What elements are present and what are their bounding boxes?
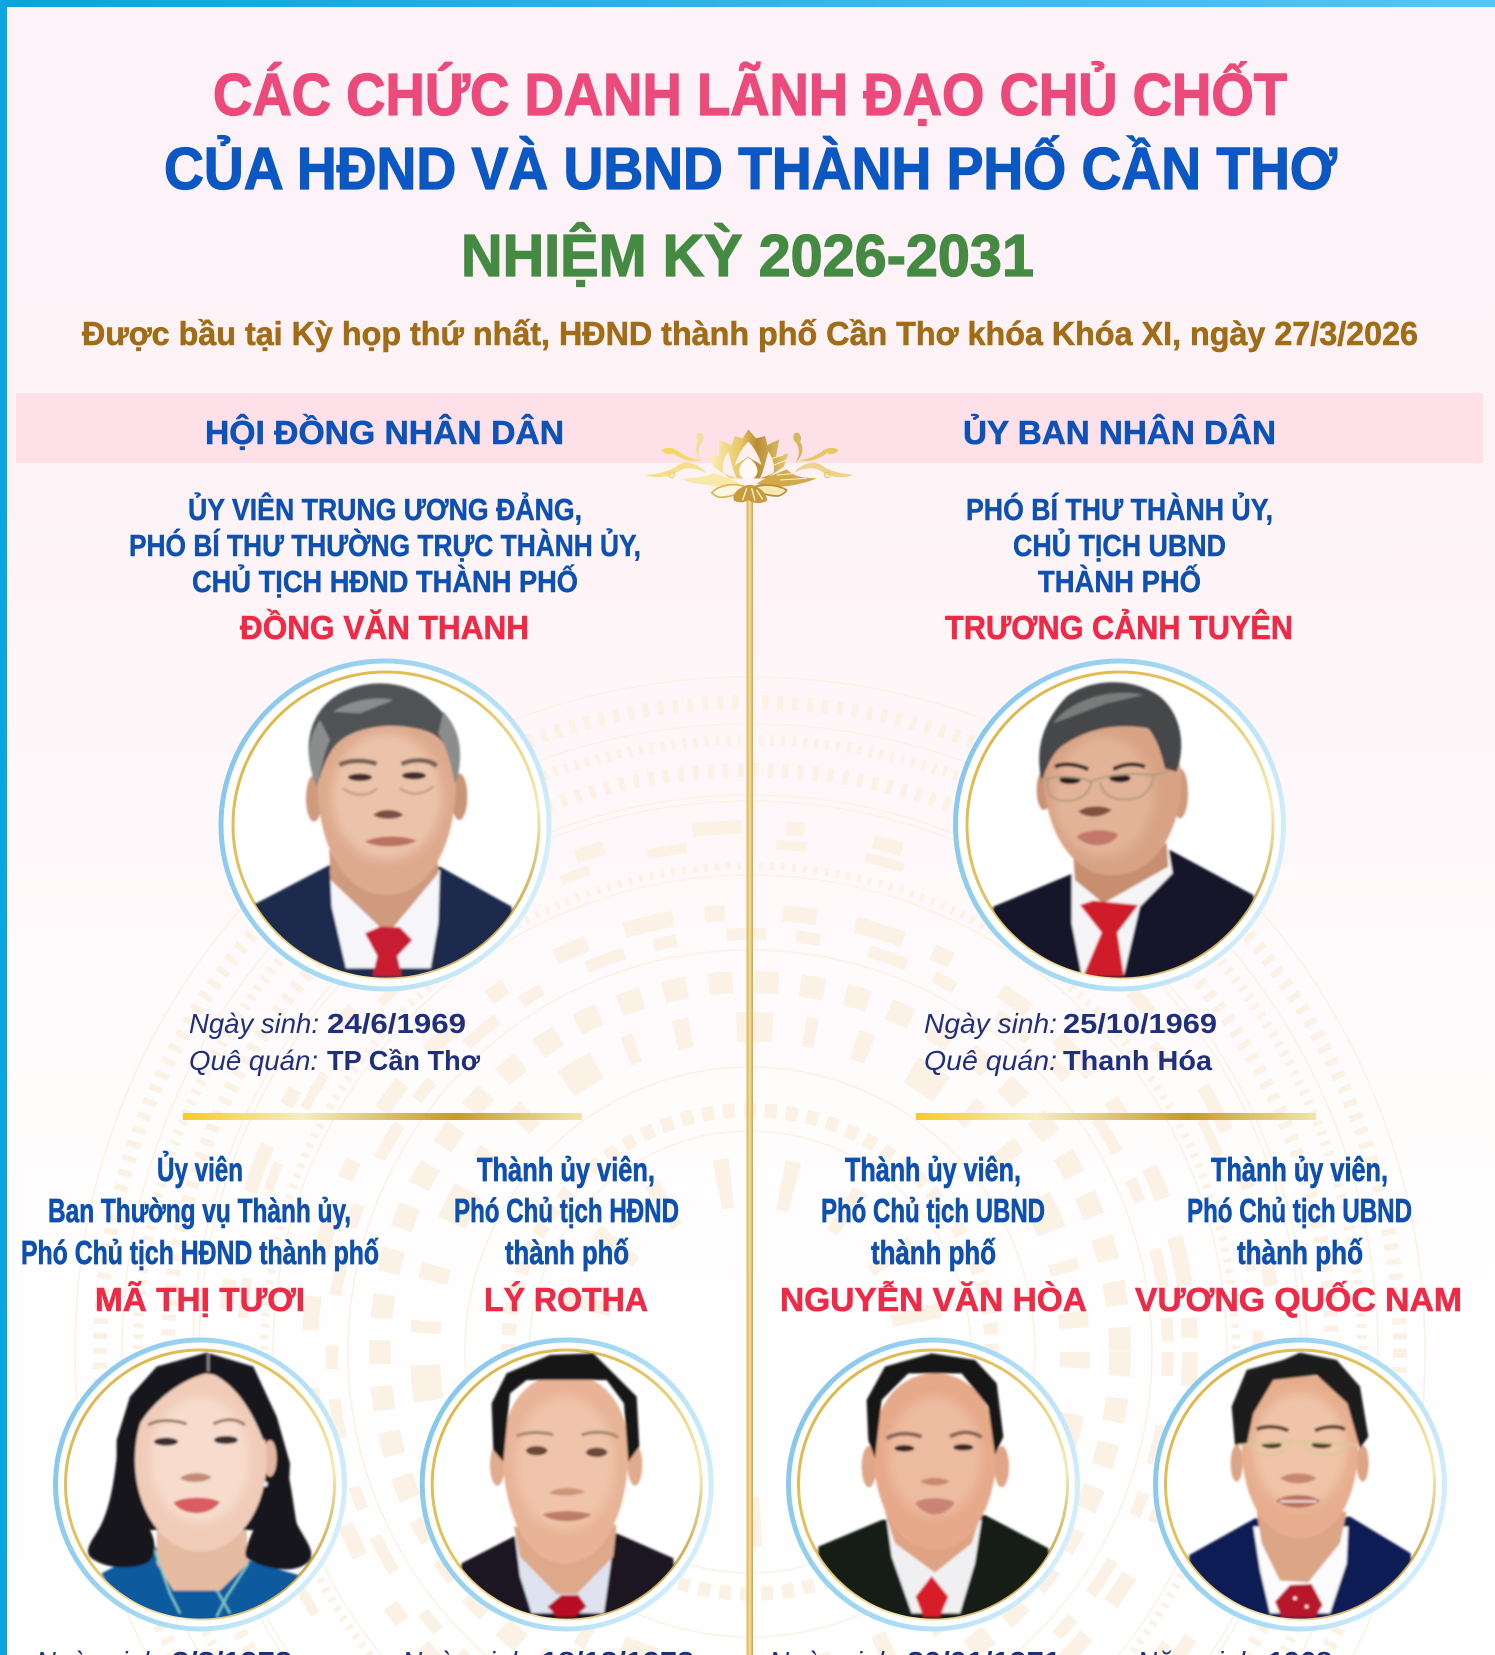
role lines: thành phố: [505, 1234, 629, 1271]
central gold divider: [747, 498, 753, 1655]
birth info: 24/6/1969: [327, 1008, 466, 1039]
portrait: Lý Rotha: [422, 1340, 711, 1629]
section heading: UBND: ỦY BAN NHÂN DÂN: [963, 414, 1276, 451]
birth info: Thanh Hóa: [1063, 1045, 1212, 1076]
role lines: Ban Thường vụ Thành ủy,: [48, 1192, 351, 1229]
panel: Vương Quốc Nam: [1135, 1151, 1462, 1655]
role lines: CHỦ TỊCH HĐND THÀNH PHỐ: [192, 563, 578, 599]
name: ĐỒNG VĂN THANH: [240, 609, 529, 646]
role lines: PHÓ BÍ THƯ THƯỜNG TRỰC THÀNH ỦY,: [129, 527, 641, 563]
role lines: CHỦ TỊCH UBND: [1013, 527, 1226, 563]
role lines: [454, 1151, 679, 1271]
role lines: [1187, 1151, 1412, 1271]
role lines: thành phố: [1237, 1234, 1363, 1271]
name: TRƯƠNG CẢNH TUYÊN: [945, 609, 1293, 646]
role lines: PHÓ BÍ THƯ THÀNH ỦY,: [966, 491, 1273, 527]
background: bronze drum pattern: [75, 677, 1425, 1655]
birth info: Ngày sinh:: [924, 1008, 1057, 1039]
title block: [82, 61, 1418, 352]
birth info: [924, 1008, 1217, 1076]
role lines: [966, 491, 1273, 599]
role lines: Thành ủy viên,: [845, 1151, 1021, 1188]
birth info: Ngày sinh:: [189, 1008, 319, 1039]
section header band: [16, 393, 1483, 463]
role lines: thành phố: [871, 1234, 996, 1271]
birth info: TP Cần Thơ: [327, 1045, 480, 1076]
section heading: HĐND: HỘI ĐỒNG NHÂN DÂN: [205, 413, 564, 451]
role lines: [129, 491, 641, 599]
birth info: [189, 1008, 480, 1076]
icon: gold lotus: [646, 429, 853, 503]
left blue border: [0, 0, 7, 1655]
portrait: Vương Quốc Nam: [1156, 1340, 1444, 1629]
birth date, cut by page edge: [36, 1646, 292, 1655]
role lines: Thành ủy viên,: [477, 1151, 655, 1188]
birth info: Quê quán:: [924, 1045, 1057, 1076]
birth year, cut by page edge: [1137, 1646, 1332, 1655]
name: NGUYỄN VĂN HÒA: [780, 1281, 1087, 1318]
panel: Nguyễn Văn Hòa: [769, 1151, 1087, 1655]
role lines: Phó Chủ tịch HĐND thành phố: [21, 1234, 379, 1271]
role lines: ỦY VIÊN TRUNG ƯƠNG ĐẢNG,: [188, 491, 582, 527]
subtitle: Được bầu tại Kỳ họp thứ nhất, HĐND thành phố Cần Thơ khóa Khóa XI, ngày 27/3/2026: [82, 315, 1418, 352]
title line 1: CÁC CHỨC DANH LÃNH ĐẠO CHỦ CHỐT: [213, 61, 1287, 128]
role lines: Phó Chủ tịch HĐND: [454, 1192, 679, 1229]
portrait: Đồng Văn Thanh: [221, 661, 549, 989]
role lines: [821, 1151, 1045, 1271]
portrait: Trương Cảnh Tuyên: [956, 661, 1284, 989]
birth info: 25/10/1969: [1063, 1008, 1217, 1039]
gold divider bar: [916, 1113, 1316, 1120]
birth info: Quê quán:: [189, 1045, 318, 1076]
panel: chairman of committee: [916, 491, 1316, 1120]
portrait: Mã Thị Tươi: [56, 1340, 344, 1629]
role lines: [21, 1151, 379, 1271]
name: VƯƠNG QUỐC NAM: [1135, 1280, 1462, 1318]
role lines: Thành ủy viên,: [1211, 1151, 1388, 1188]
birth date, cut by page edge: [769, 1646, 1061, 1655]
name: LÝ ROTHA: [484, 1281, 648, 1318]
role lines: Ủy viên: [157, 1151, 243, 1188]
gold divider bar: [183, 1113, 582, 1120]
title line 2: CỦA HĐND VÀ UBND THÀNH PHỐ CẦN THƠ: [164, 135, 1338, 202]
name: MÃ THỊ TƯƠI: [95, 1281, 305, 1318]
top blue border: [0, 0, 1495, 7]
panel: Lý Rotha: [402, 1151, 711, 1655]
role lines: THÀNH PHỐ: [1038, 563, 1201, 599]
panel: chairman of council: [129, 491, 641, 1120]
role lines: Phó Chủ tịch UBND: [821, 1192, 1045, 1229]
role lines: Phó Chủ tịch UBND: [1187, 1192, 1412, 1229]
portrait: Nguyễn Văn Hòa: [788, 1340, 1078, 1629]
panel: Mã Thị Tươi: [21, 1151, 379, 1655]
birth date, cut by page edge: [402, 1646, 694, 1655]
title line 3: NHIỆM KỲ 2026-2031: [461, 222, 1034, 289]
